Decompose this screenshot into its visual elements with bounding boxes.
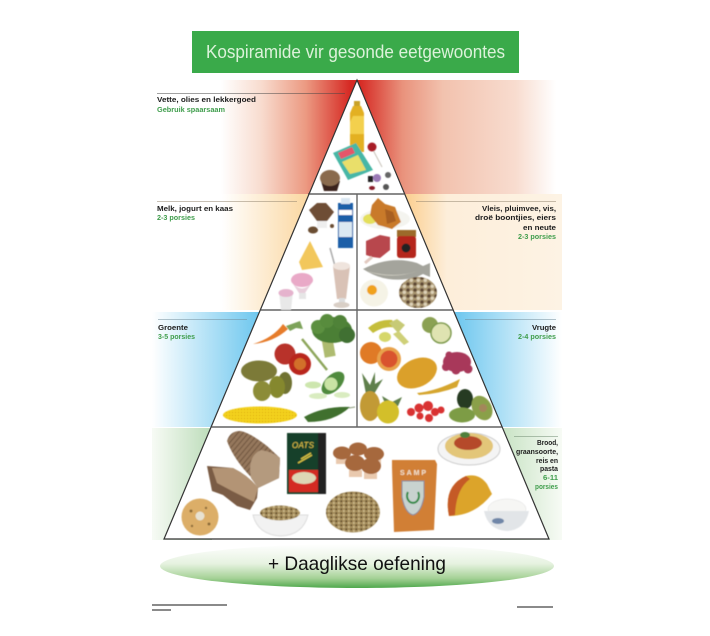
icon: chips bag (333, 143, 373, 180)
title banner (192, 31, 519, 73)
icon: potatoes (241, 360, 292, 401)
icon: sweets (368, 172, 391, 190)
icon: bread (207, 431, 280, 510)
label: fruit: 2-4 porsies (518, 332, 556, 341)
label: vegetables (158, 320, 247, 341)
label: vegetables: Groente (158, 323, 188, 332)
label: grains (514, 436, 559, 491)
label: fruit (465, 320, 556, 341)
icon: nuts (399, 277, 437, 308)
icon: cucumber slices (305, 367, 350, 399)
label: grains: porsies (535, 482, 558, 491)
icon: pineapples (360, 372, 402, 424)
label: protein: 2-3 porsies (518, 232, 556, 241)
exercise ellipse: + Daaglikse oefening (268, 553, 446, 575)
icon: oats box: OATS (292, 441, 315, 450)
icon: fried egg (360, 280, 388, 306)
label: fruit: Vrugte (532, 323, 556, 332)
label: protein: en neute (523, 223, 556, 232)
icon: strawberries (407, 401, 444, 422)
icon: muffins (333, 442, 384, 479)
label: dairy: Melk, jogurt en kaas (157, 204, 233, 213)
icon: samp bag (392, 460, 437, 532)
icon: yogurt (278, 273, 313, 310)
label: grains: pasta (540, 464, 559, 473)
icon: cereal bowl (253, 506, 308, 536)
icon: bananas (368, 319, 409, 345)
label: protein: droë boontjies, eiers (475, 213, 556, 222)
icon: rice bowl (484, 499, 529, 531)
icon: chicken plate (360, 198, 410, 229)
icon: cheese (299, 241, 323, 270)
icon: raw meat (365, 235, 390, 263)
icon: corn (223, 406, 297, 424)
label: vegetables: 3-5 porsies (158, 332, 195, 341)
icon: melon (392, 351, 460, 395)
label: grains: Brood, (537, 438, 558, 447)
icon: chocolate dessert (308, 203, 334, 234)
icon: samp bag: SAMP (400, 470, 426, 477)
icon: green bean (302, 339, 327, 370)
icon: lollipop (368, 142, 382, 167)
icon: milk carton (338, 198, 353, 248)
food illustrations (182, 101, 529, 536)
background colour bands (152, 80, 562, 540)
label: dairy (157, 202, 297, 222)
label: grains: 6-11 (543, 473, 559, 482)
icon: oats box (287, 433, 326, 494)
icon: milkshake (330, 248, 350, 308)
icon: tomatoes (274, 344, 311, 375)
icon: oil bottle (350, 101, 364, 152)
label: protein: Vleis, pluimvee, vis, (482, 204, 556, 213)
icon: avocados (449, 389, 497, 424)
icon: broccoli (311, 314, 355, 358)
label: fats: Vette, olies en lekkergoed (157, 95, 256, 104)
icon: apples (422, 317, 451, 343)
pyramid outline (164, 80, 549, 539)
icon: spaghetti plate (438, 432, 500, 465)
label: grains: graansoorte, (516, 447, 558, 456)
label: grains: reis en (536, 456, 558, 465)
icon: fish (363, 260, 430, 280)
footer rules (152, 604, 553, 611)
title banner: Kospiramide vir gesonde eetgewoontes (206, 42, 505, 62)
exercise ellipse (160, 544, 554, 588)
icon: grain pile (326, 492, 380, 532)
label: protein (416, 202, 556, 241)
label: dairy: 2-3 porsies (157, 213, 195, 222)
icon: cupcake (320, 170, 340, 191)
label: fats (157, 94, 345, 114)
icon: bagel (182, 498, 218, 536)
icon: jar (397, 230, 416, 258)
icon: taco (448, 475, 492, 516)
icon: grapes (442, 352, 472, 374)
label: fats: Gebruik spaarsaam (157, 105, 225, 114)
icon: pea pod (304, 407, 355, 422)
icon: orange and grapefruit (360, 342, 401, 371)
icon: carrot (253, 321, 303, 344)
